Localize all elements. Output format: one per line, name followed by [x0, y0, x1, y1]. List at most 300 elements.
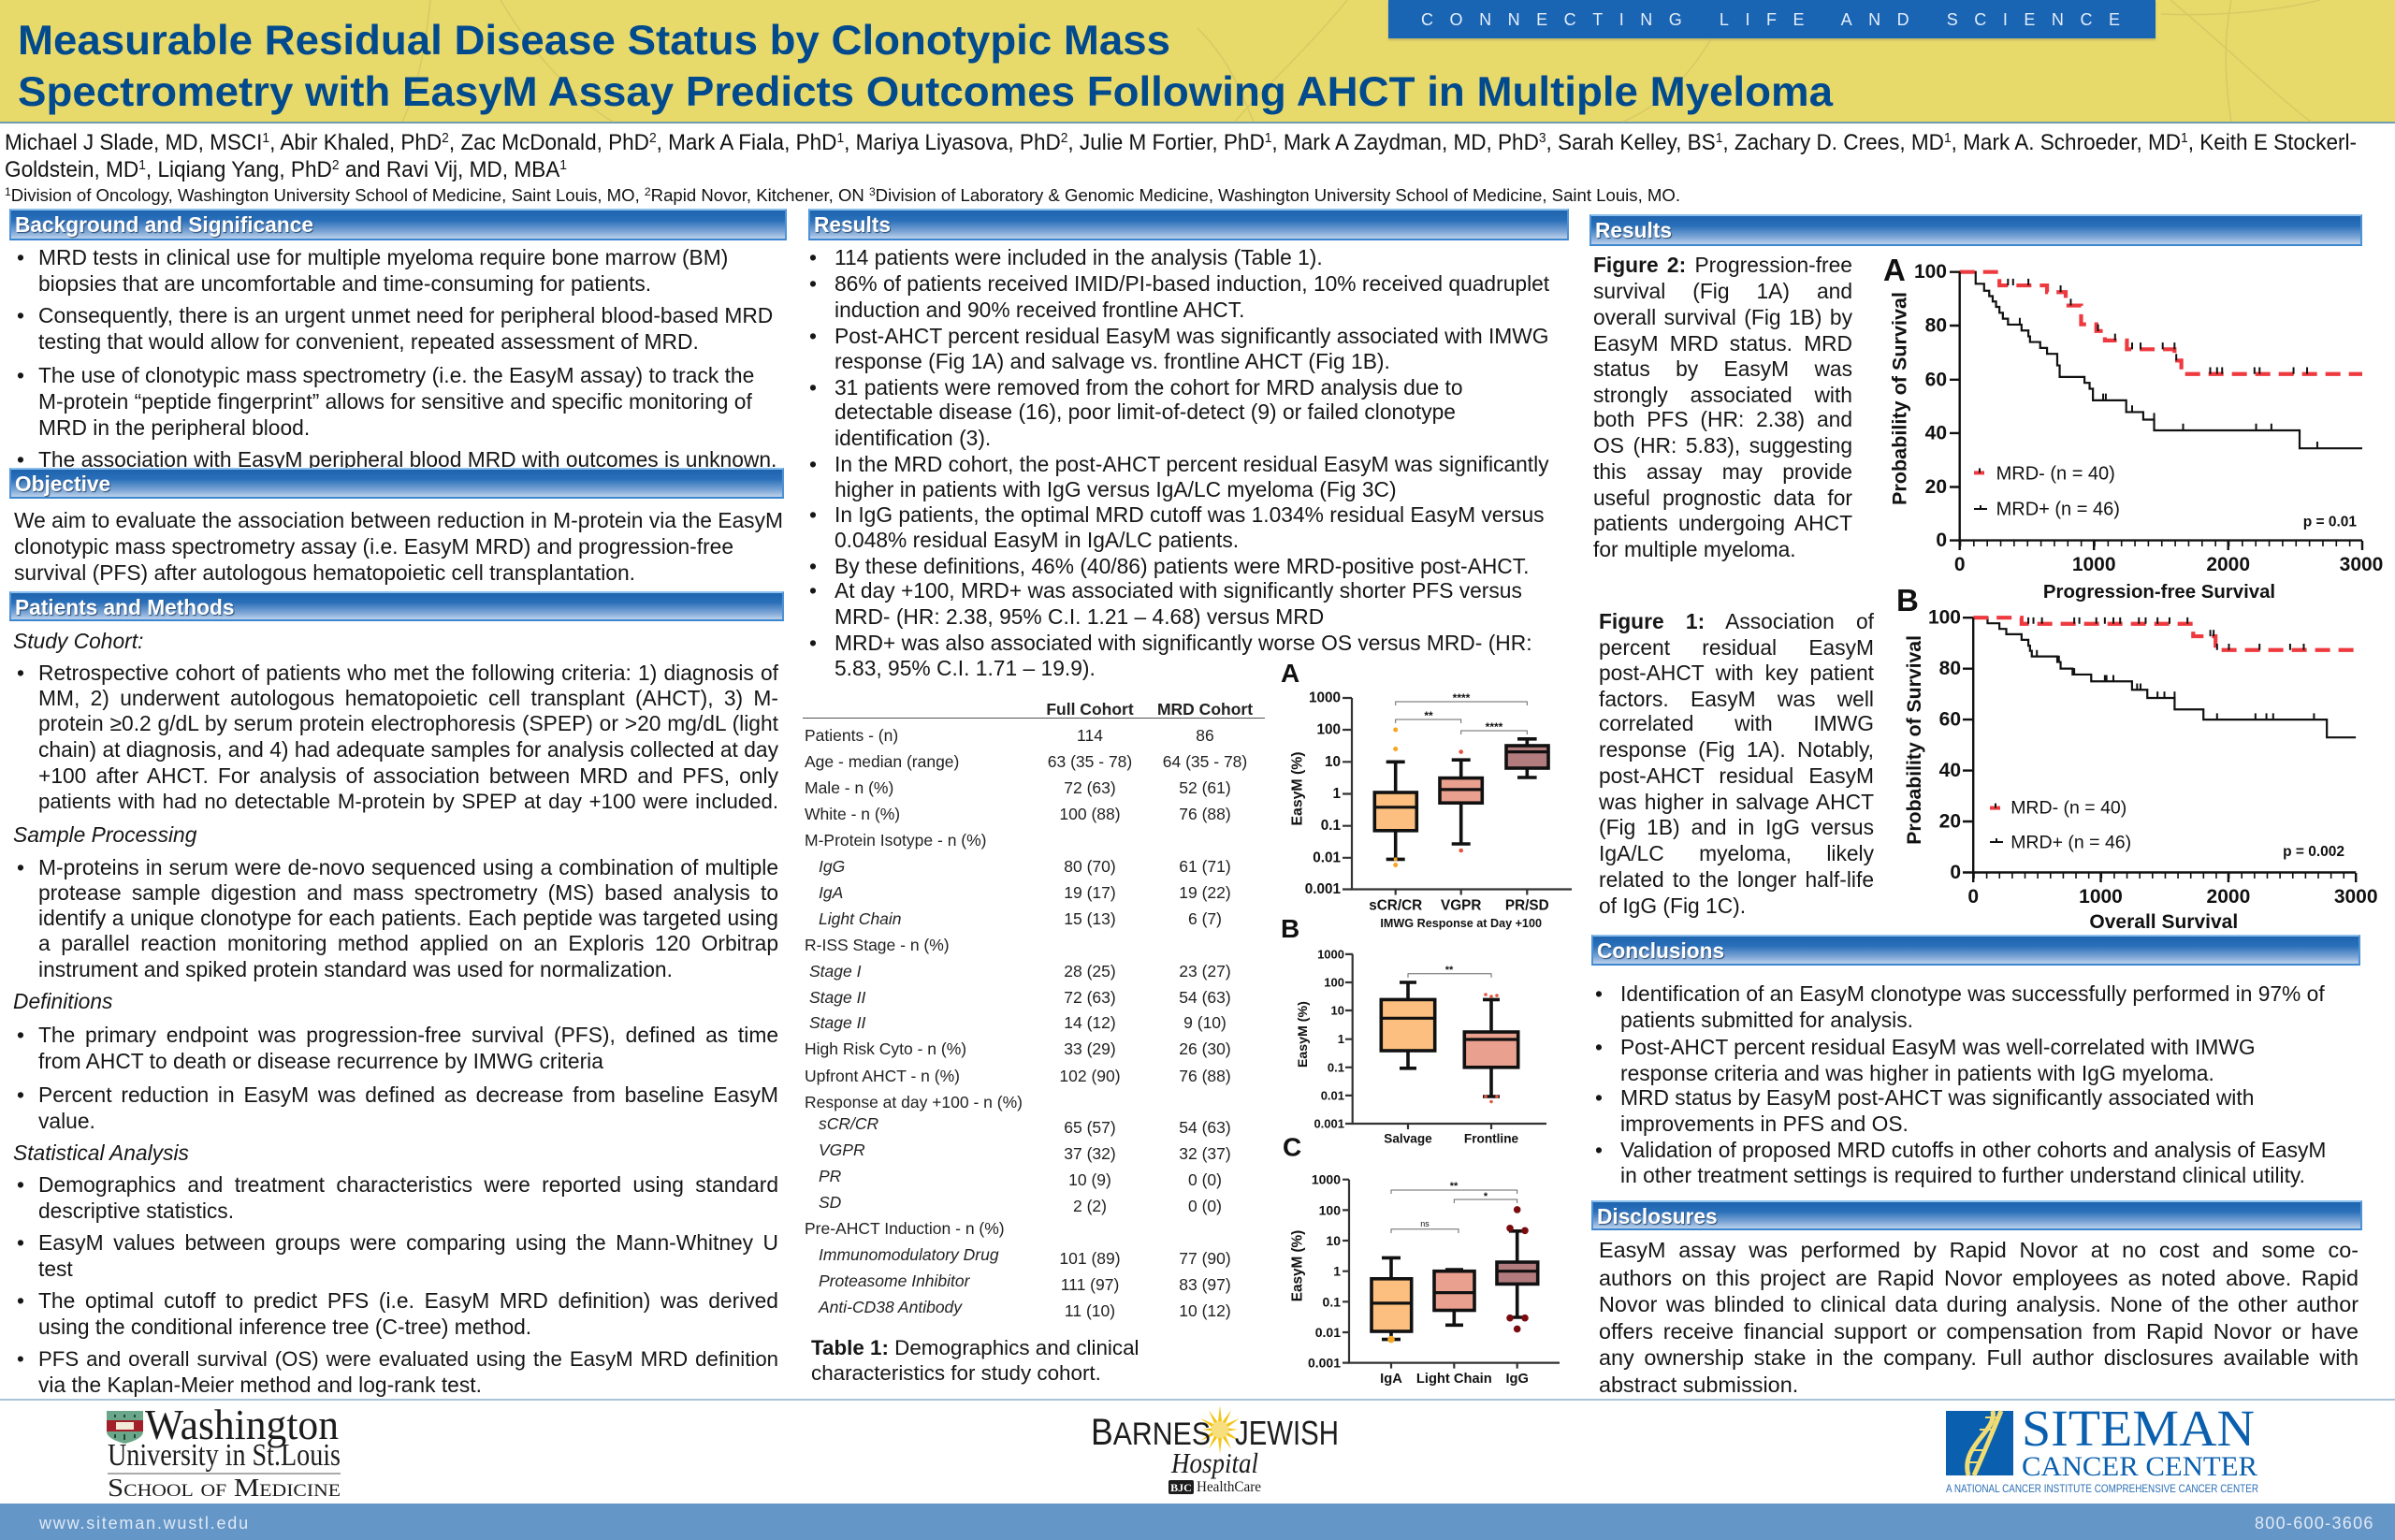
panel: disclosures: any ownership stake in the company. Full author disclosures available with — [1599, 1345, 2359, 1370]
authors and affiliations: Goldstein, MD — [5, 157, 150, 182]
panel: results (middle column): response (Fig 1A) and salvage vs. frontline AHCT (Fig 1B). — [835, 348, 1390, 372]
authors and affiliations: , Mark A. Schroeder, MD — [1952, 130, 2181, 155]
logo: Barnes-Jewish Hospital: HealthCare — [1197, 1479, 1261, 1495]
authors and affiliations: 1 — [836, 130, 844, 146]
panel: results (middle column): 0.048% residual EasyM in IgA/LC patients. — [835, 528, 1239, 552]
panel: patients and methods: patients with had no detectable M-protein by SPEP at day +100 were included. — [38, 790, 778, 812]
table 1: demographics: 54 (63) — [1179, 988, 1231, 1007]
panel: patients and methods: MM, 2) underwent autologous hematopoietic cell transplant (AHCT), 3) M- — [38, 685, 778, 709]
table 1: demographics: 10 (9) — [1068, 1170, 1111, 1189]
survival chart A: progression-free survival: Progression-free Survival — [2043, 582, 2275, 603]
panel: background and significance: MRD tests in clinical use for multiple myeloma require bone marrow (BM) — [38, 245, 728, 269]
panel: background and significance: The use of clonotypic mass spectrometry (i.e. the EasyM assay) to track the — [38, 363, 754, 387]
authors and affiliations: , Keith E Stockerl- — [2188, 130, 2357, 155]
authors and affiliations: 3 — [1539, 130, 1546, 146]
panel: patients and methods: EasyM values between groups were comparing using the Mann-Whitney U — [38, 1229, 778, 1254]
table 1: demographics: SD — [819, 1193, 841, 1212]
table 1: demographics: IgA — [819, 883, 843, 902]
panel: conclusions: in other treatment settings is required to further understand clinical utility. — [1620, 1162, 2305, 1186]
box plot A: IMWG response: PR/SD — [1505, 898, 1549, 913]
table caption: characteristics for study cohort. — [811, 1360, 1101, 1385]
survival chart A: progression-free survival: 80 — [1925, 314, 1947, 337]
survival chart A: progression-free survival: Probability of Survival — [1888, 292, 1910, 505]
text: figure 2 description: overall survival (Fig 1B) by — [1593, 305, 1852, 329]
table 1: demographics: Anti-CD38 Antibody — [819, 1298, 962, 1316]
authors and affiliations: 2 — [1061, 130, 1067, 146]
authors and affiliations: Division of Oncology, Washington University School of Medicine, Saint Louis, MO, — [11, 185, 645, 205]
survival chart B: overall survival: Probability of Survival — [1904, 635, 1925, 845]
panel: background and significance: The association with EasyM peripheral blood MRD with outcomes is unknown. — [38, 447, 777, 472]
table 1: demographics: 86 — [1196, 726, 1214, 745]
box plot A: IMWG response: 1 — [1332, 786, 1341, 802]
text: figure 1 description: factors. EasyM was well — [1599, 687, 1874, 711]
panel: patients and methods: descriptive statistics. — [38, 1198, 234, 1222]
panel: disclosures: EasyM assay was performed by Rapid Novor at no cost and some co- — [1599, 1237, 2359, 1261]
survival chart A: progression-free survival: 1000 — [2072, 554, 2116, 575]
authors and affiliations: , Abir Khaled, PhD — [269, 130, 442, 155]
box plot C: isotype: Light Chain — [1416, 1372, 1492, 1387]
table 1: demographics: Age - median (range) — [805, 752, 959, 771]
box plot A: IMWG response: **** — [1453, 691, 1471, 705]
table 1: demographics: 10 (12) — [1179, 1301, 1231, 1320]
table 1: demographics: 102 (90) — [1059, 1067, 1121, 1085]
survival chart A: progression-free survival: 3000 — [2340, 554, 2383, 575]
title: Spectrometry with EasyM Assay Predicts Outcomes Following AHCT in Multiple Myeloma — [18, 69, 1834, 115]
authors and affiliations: 1 — [262, 130, 269, 146]
box plot C: isotype: 0.01 — [1315, 1325, 1341, 1340]
table 1: demographics: 76 (88) — [1179, 805, 1231, 823]
panel: results (middle column): 5.83, 95% C.I. 1.71 – 19.9). — [835, 655, 1096, 679]
survival chart B: overall survival: MRD- (n = 40) — [2010, 798, 2126, 819]
survival chart B: overall survival: Overall Survival — [2089, 911, 2238, 933]
text: figure 1 description: of IgG (Fig 1C). — [1599, 893, 1746, 917]
box plot C: isotype: C — [1283, 1133, 1301, 1162]
panel: disclosures: offers receive financial support or compensation from Rapid Novor or have — [1599, 1319, 2359, 1344]
table 1: demographics: Full Cohort — [1046, 700, 1134, 719]
box plot B: salvage vs frontline — [1281, 914, 1546, 1145]
panel: patients and methods: Statistical Analysis — [13, 1140, 189, 1164]
panel: patients and methods: PFS and overall survival (OS) were evaluated using the EasyM MRD definition — [38, 1347, 778, 1370]
table 1: demographics: MRD Cohort — [1157, 700, 1253, 719]
table 1: demographics: 65 (57) — [1064, 1118, 1116, 1137]
panel: conclusions: Identification of an EasyM clonotype was successfully performed in 97% of — [1620, 981, 2325, 1005]
panel: objective: clonotypic mass spectrometry assay (i.e. EasyM MRD) and progression-free — [14, 533, 733, 558]
header band — [0, 0, 2395, 123]
box plot C: isotype: IgA — [1380, 1372, 1402, 1387]
table 1: demographics: R-ISS Stage - n (%) — [805, 936, 950, 954]
banner: connecting life and science: CONNECTING LIFE AND SCIENCE — [1421, 10, 2120, 29]
logo: Barnes-Jewish Hospital: BJC — [1170, 1481, 1192, 1494]
box plot C: isotype — [1283, 1133, 1560, 1387]
table 1: demographics: 11 (10) — [1065, 1301, 1115, 1320]
panel: patients and methods: Retrospective cohort of patients who met the following criteria: 1) diagnosis of — [38, 661, 778, 685]
panel: conclusions: patients submitted for analysis. — [1620, 1007, 1913, 1031]
text: figure 1 description: (Fig 1B) and in IgG versus — [1599, 814, 1874, 838]
panel: background and significance — [9, 209, 787, 472]
box plot C: isotype: ** — [1450, 1181, 1459, 1192]
table 1: demographics: 64 (35 - 78) — [1163, 752, 1247, 771]
authors and affiliations: 2 — [442, 130, 449, 146]
authors and affiliations: 2 — [645, 185, 651, 198]
box plot A: IMWG response: 1000 — [1309, 690, 1341, 705]
box plot A: IMWG response: 0.01 — [1313, 850, 1341, 865]
panel: results (right column heading): Results — [1595, 218, 1672, 242]
box plot A: IMWG response: 0.001 — [1305, 881, 1341, 897]
panel: background and significance: M-protein “peptide fingerprint” allows for sensitive and specific monitoring of — [38, 389, 752, 414]
survival chart A: progression-free survival: p = 0.01 — [2303, 515, 2357, 530]
panel: results (middle column): identification (3). — [835, 425, 991, 449]
banner: connecting life and science — [1388, 0, 2156, 38]
authors and affiliations: , Zac McDonald, PhD — [449, 130, 649, 155]
text: figure 1 description: response (Fig 1A). Notably, — [1599, 737, 1874, 762]
table 1: demographics: 111 (97) — [1061, 1275, 1119, 1294]
panel: patients and methods: from AHCT to death or disease recurrence by IMWG criteria — [38, 1048, 603, 1072]
box plot A: IMWG response: 10 — [1325, 754, 1341, 770]
panel: conclusions: improvements in PFS and OS. — [1620, 1111, 1909, 1136]
box plot B: salvage vs frontline: 1 — [1338, 1032, 1344, 1046]
table 1: demographics: M-Protein Isotype - n (%) — [805, 831, 986, 850]
table 1: demographics: 37 (32) — [1064, 1144, 1116, 1163]
panel: patients and methods: Percent reduction in EasyM was defined as decrease from baseline EasyM — [38, 1082, 778, 1106]
logo: Barnes-Jewish Hospital — [1091, 1405, 1339, 1495]
logo: Siteman Cancer Center: CANCER CENTER — [2022, 1451, 2257, 1482]
panel: background and significance: Consequently, there is an urgent unmet need for peripheral blood-based MRD — [38, 303, 773, 327]
authors and affiliations: 3 — [869, 185, 876, 198]
panel: patients and methods — [9, 591, 784, 1397]
panel: results (middle column): MRD- (HR: 2.38, 95% C.I. 1.21 – 4.68) versus MRD — [835, 604, 1324, 629]
authors and affiliations: 1 — [138, 157, 146, 173]
table 1: demographics: 80 (70) — [1064, 857, 1116, 876]
panel: patients and methods: The primary endpoint was progression-free survival (PFS), defined as time — [38, 1022, 778, 1046]
box plot B: salvage vs frontline: ** — [1445, 965, 1454, 976]
text: figure 1 description: IgA/LC myeloma, likely — [1599, 840, 1874, 864]
box plot A: IMWG response: ** — [1424, 709, 1433, 722]
table 1: demographics: Stage II — [809, 988, 865, 1007]
authors and affiliations: 1 — [1944, 130, 1952, 146]
title: Measurable Residual Disease Status by Clonotypic Mass — [18, 18, 1170, 64]
table 1: demographics: PR — [819, 1167, 841, 1185]
table 1: demographics: 15 (13) — [1064, 909, 1116, 928]
panel: patients and methods: Study Cohort: — [13, 629, 143, 653]
table 1: demographics: Light Chain — [819, 909, 902, 928]
panel: patients and methods: protease sample digestion and mass spectrometry (MS) based analysis to — [38, 879, 778, 904]
footer band — [0, 1504, 2395, 1540]
table 1: demographics: Male - n (%) — [805, 778, 893, 797]
logo: Washington University School of Medicine: University in St.Louis — [108, 1438, 341, 1473]
table 1: demographics: 52 (61) — [1179, 778, 1231, 797]
survival chart B: overall survival: 20 — [1939, 810, 1961, 833]
panel: disclosures: abstract submission. — [1599, 1372, 1798, 1396]
panel: background and significance: Background and Significance — [15, 212, 313, 237]
table 1: demographics: 72 (63) — [1064, 988, 1116, 1007]
panel: patients and methods: via the Kaplan-Meier method and log-rank test. — [38, 1372, 482, 1396]
survival chart A: progression-free survival: 20 — [1925, 476, 1947, 498]
survival chart B: overall survival: 3000 — [2334, 886, 2378, 908]
panel: objective: Objective — [15, 472, 110, 496]
table 1: demographics: 19 (17) — [1064, 883, 1116, 902]
authors and affiliations: 2 — [332, 157, 340, 173]
panel: conclusions: Validation of proposed MRD cutoffs in other cohorts and analysis of EasyM — [1620, 1138, 2326, 1162]
table 1: demographics: 14 (12) — [1064, 1013, 1116, 1032]
text: figure 1 description: Figure 1: Association of — [1599, 608, 1874, 632]
panel: results (middle column): 31 patients were removed from the cohort for MRD analysis due to — [835, 374, 1463, 399]
authors and affiliations: , Mark A Zaydman, MD, PhD — [1271, 130, 1539, 155]
survival chart B: overall survival: MRD+ (n = 46) — [2010, 832, 2131, 852]
panel: results (middle column) — [808, 209, 1569, 680]
table 1: demographics: White - n (%) — [805, 805, 900, 823]
table 1: demographics: Immunomodulatory Drug — [819, 1245, 999, 1264]
box plot C: isotype: ns — [1420, 1219, 1430, 1228]
panel: conclusions: Post-AHCT percent residual EasyM was well-correlated with IMWG — [1620, 1035, 2256, 1059]
panel: patients and methods: value. — [38, 1108, 95, 1132]
text: figure 2 description: both PFS (HR: 2.38) and — [1593, 406, 1852, 430]
authors and affiliations: 1 — [1265, 130, 1271, 146]
box plot C: isotype: 1 — [1333, 1264, 1341, 1279]
panel: patients and methods: using the conditional inference tree (C-tree) method. — [38, 1314, 531, 1338]
box plot C: isotype: * — [1484, 1191, 1488, 1202]
authors and affiliations: 1 — [5, 185, 11, 198]
panel: conclusions: Conclusions — [1597, 938, 1724, 963]
table 1: demographics: 100 (88) — [1059, 805, 1121, 823]
logo: Washington University School of Medicine: School of Medicine — [108, 1474, 341, 1502]
panel: background and significance: MRD in the peripheral blood. — [38, 415, 310, 440]
table 1: demographics: 23 (27) — [1179, 962, 1231, 981]
panel: patients and methods: Demographics and treatment characteristics were reported using standard — [38, 1171, 778, 1196]
panel: patients and methods: M-proteins in serum were de-novo sequenced using a combination of multiple — [38, 855, 778, 879]
panel: results (middle column): induction and 90% received frontline AHCT. — [835, 298, 1244, 322]
text: figure 2 description — [1593, 253, 1852, 561]
authors and affiliations: and Ravi Vij, MD, MBA — [340, 157, 560, 182]
authors and affiliations: Rapid Novor, Kitchener, ON — [651, 185, 869, 205]
text: figure 2 description: for multiple myeloma. — [1593, 537, 1796, 561]
box plot A: IMWG response: A — [1281, 659, 1299, 688]
panel: results (middle column): detectable disease (16), poor limit-of-detect (9) or failed clonotype — [835, 399, 1456, 423]
survival chart A: progression-free survival: 60 — [1925, 369, 1947, 390]
panel: patients and methods: Sample Processing — [13, 821, 196, 846]
text: figure 1 description — [1599, 608, 1874, 918]
panel: patients and methods: chain) at diagnosis, and 4) had adequate samples for analysis collected at day — [38, 737, 778, 762]
logo: Barnes-Jewish Hospital: Hospital — [1170, 1446, 1258, 1479]
box plot A: IMWG response: sCR/CR — [1369, 898, 1422, 913]
text: figure 2 description: OS (HR: 5.83), suggesting — [1593, 432, 1852, 457]
box plot A: IMWG response: 100 — [1316, 722, 1341, 737]
panel: disclosures: Disclosures — [1597, 1204, 1718, 1228]
box plot A: IMWG response — [1281, 659, 1572, 930]
panel: conclusions — [1591, 935, 2360, 1187]
text: figure 2 description: status by EasyM was — [1593, 356, 1852, 380]
table caption: Table 1: Demographics and clinical — [811, 1336, 1139, 1358]
survival chart B: overall survival: 100 — [1928, 607, 1961, 629]
text: figure 2 description: survival (Fig 1A) and — [1593, 279, 1852, 303]
figure 1 box plots — [1281, 659, 1572, 1387]
table 1: demographics: High Risk Cyto - n (%) — [805, 1039, 966, 1058]
table 1: demographics: IgG — [819, 857, 845, 876]
authors and affiliations: 2 — [649, 130, 657, 146]
panel: disclosures — [1591, 1200, 2362, 1396]
panel: patients and methods: identify a unique clonotype for each patients. Each peptide was targeted using — [38, 906, 778, 930]
survival chart B: overall survival: 0 — [1950, 862, 1961, 883]
table 1: demographics: Response at day +100 - n (%) — [805, 1093, 1023, 1111]
logo: Washington University School of Medicine: Washington — [145, 1401, 339, 1448]
panel: patients and methods: protein ≥0.2 g/dL by serum protein electrophoresis (SPEP) or >20 mg/dL (light — [38, 711, 778, 735]
box plot A: IMWG response: 0.1 — [1321, 818, 1341, 834]
survival chart B: overall survival: 60 — [1939, 709, 1961, 731]
logo: Barnes-Jewish Hospital: BARNES — [1091, 1412, 1211, 1453]
authors and affiliations: , Mark A Fiala, PhD — [657, 130, 836, 155]
authors and affiliations: , Liqiang Yang, PhD — [146, 157, 332, 182]
panel: results (middle column): In IgG patients, the optimal MRD cutoff was 1.034% residual EasyM versus — [835, 501, 1545, 526]
survival chart A: progression-free survival: 100 — [1914, 261, 1947, 283]
box plot C: isotype: 0.001 — [1308, 1356, 1341, 1371]
authors and affiliations — [5, 130, 2357, 205]
table 1: demographics: VGPR — [819, 1140, 865, 1159]
box plot B: salvage vs frontline: B — [1281, 914, 1299, 943]
table 1: demographics: 33 (29) — [1064, 1039, 1116, 1058]
survival chart A: progression-free survival: 0 — [1936, 530, 1947, 551]
panel: results (middle column): 86% of patients received IMID/PI-based induction, 10% received quadruplet — [835, 271, 1549, 296]
panel: objective: survival (PFS) after autologous hematopoietic cell transplantation. — [14, 559, 635, 584]
title — [18, 18, 1834, 115]
panel: disclosures: Novor was blinded to clinical data during analysis. None of the other author — [1599, 1291, 2359, 1315]
text: figure 2 description: EasyM MRD status. MRD — [1593, 331, 1852, 356]
logo: Barnes-Jewish Hospital: JEWISH — [1235, 1414, 1339, 1452]
table 1: demographics: 61 (71) — [1179, 857, 1231, 876]
authors and affiliations: 1 — [559, 157, 567, 173]
footer rule — [0, 1399, 2395, 1401]
survival chart A: progression-free survival: MRD- (n = 40) — [1996, 463, 2115, 484]
logo: Siteman Cancer Center: A NATIONAL CANCER INSTITUTE COMPREHENSIVE CANCER CENTER — [1946, 1482, 2258, 1495]
panel: background and significance: biopsies that are uncomfortable and time-consuming for patients. — [38, 271, 651, 296]
table 1: demographics: 77 (90) — [1179, 1249, 1231, 1268]
box plot C: isotype: 10 — [1326, 1233, 1341, 1248]
panel: results (middle column): By these definitions, 46% (40/86) patients were MRD-positive post-AHCT. — [835, 554, 1529, 578]
table 1: demographics: 28 (25) — [1064, 962, 1116, 981]
panel: patients and methods: a parallel reaction monitoring method applied on an Exploris 120 Orbitrap — [38, 930, 778, 954]
text: figure 1 description: related to the longer half-life — [1599, 866, 1874, 891]
survival chart A: progression-free survival: MRD+ (n = 46) — [1996, 500, 2120, 520]
panel: objective: We aim to evaluate the association between reduction in M-protein via the EasyM — [14, 507, 783, 531]
survival chart B: overall survival: 0 — [1967, 886, 1979, 908]
figure 2 Kaplan-Meier charts — [1883, 253, 2383, 933]
panel: patients and methods: The optimal cutoff to predict PFS (i.e. EasyM MRD definition) was derived — [38, 1287, 778, 1312]
box plot B: salvage vs frontline: 0.001 — [1314, 1117, 1344, 1130]
table 1: demographics: 19 (22) — [1179, 883, 1231, 902]
table 1: demographics: Upfront AHCT - n (%) — [805, 1067, 960, 1085]
authors and affiliations: Division of Laboratory & Genomic Medicine, Washington University School of Medicine, Saint Louis, MO. — [876, 185, 1680, 205]
logo: Siteman Cancer Center — [1946, 1400, 2258, 1495]
footer band: www.siteman.wustl.edu — [39, 1514, 250, 1533]
authors and affiliations: , Sarah Kelley, BS — [1546, 130, 1716, 155]
box plot A: IMWG response: VGPR — [1441, 898, 1481, 913]
survival chart B: overall survival: p = 0.002 — [2283, 844, 2344, 860]
box plot C: isotype: 100 — [1319, 1202, 1341, 1217]
panel: patients and methods: Definitions — [13, 988, 112, 1012]
panel: conclusions: response criteria and was higher in patients with IgG myeloma. — [1620, 1061, 2214, 1085]
text: figure 2 description: useful prognostic data for — [1593, 485, 1852, 509]
box plot A: IMWG response: IMWG Response at Day +100 — [1380, 917, 1542, 930]
table 1: demographics: 32 (37) — [1179, 1144, 1231, 1163]
table 1: demographics: Patients - (n) — [805, 726, 898, 745]
text: figure 2 description: this assay may provide — [1593, 458, 1852, 483]
box plot C: isotype: 1000 — [1312, 1172, 1341, 1187]
authors and affiliations: , Zachary D. Crees, MD — [1722, 130, 1944, 155]
survival chart B: overall survival: B — [1896, 583, 1919, 617]
panel: results (middle column): Post-AHCT percent residual EasyM was significantly associated with IMWG — [835, 324, 1549, 348]
box plot A: IMWG response: EasyM (%) — [1289, 751, 1306, 826]
table 1: demographics: sCR/CR — [819, 1114, 878, 1133]
panel: results (middle column): MRD+ was also associated with significantly worse OS versus MRD- (HR: — [835, 631, 1532, 655]
survival chart A: progression-free survival: 0 — [1954, 554, 1966, 575]
authors and affiliations: Michael J Slade, MD, MSCI — [5, 130, 285, 155]
panel: patients and methods: instrument and spiked protein standard was used for normalization. — [38, 956, 673, 981]
survival chart B: overall survival: 2000 — [2207, 886, 2250, 908]
panel: results (middle column): Results — [814, 212, 891, 237]
survival chart A: progression-free survival: 2000 — [2206, 554, 2250, 575]
panel: background and significance: testing that would allow for convenient, repeated assessment of MRD. — [38, 329, 699, 354]
survival chart B: overall survival — [1896, 583, 2378, 933]
table 1: demographics: 76 (88) — [1179, 1067, 1231, 1085]
table caption — [811, 1336, 1139, 1385]
footer band: 800-600-3606 — [2255, 1514, 2374, 1533]
table 1: demographics: 63 (35 - 78) — [1048, 752, 1132, 771]
panel: objective — [9, 468, 784, 585]
survival chart A: progression-free survival — [1883, 253, 2383, 603]
panel: results (middle column): At day +100, MRD+ was associated with significantly shorter PFS versus — [835, 578, 1522, 603]
table 1: demographics: Pre-AHCT Induction - n (%) — [805, 1219, 1005, 1238]
survival chart B: overall survival: 1000 — [2079, 886, 2123, 908]
table 1: demographics: Proteasome Inhibitor — [819, 1271, 969, 1290]
text: figure 1 description: post-AHCT residual EasyM — [1599, 763, 1874, 788]
panel: results (middle column): In the MRD cohort, the post-AHCT percent residual EasyM was significantly — [835, 451, 1549, 475]
panel: results (middle column): 114 patients were included in the analysis (Table 1). — [835, 245, 1323, 269]
table 1: demographics: 72 (63) — [1064, 778, 1116, 797]
authors and affiliations: , Mariya Liyasova, PhD — [844, 130, 1061, 155]
panel: conclusions: MRD status by EasyM post-AHCT was significantly associated with — [1620, 1085, 2254, 1110]
panel: disclosures: authors on this project are Rapid Novor employees as noted above. Rapid — [1599, 1265, 2359, 1289]
box plot B: salvage vs frontline: 100 — [1324, 975, 1344, 990]
text: figure 1 description: percent residual EasyM — [1599, 634, 1874, 659]
box plot B: salvage vs frontline: 0.1 — [1328, 1060, 1344, 1074]
survival chart A: progression-free survival: A — [1883, 253, 1906, 287]
table 1: demographics: Stage II — [809, 1013, 865, 1032]
box plot A: IMWG response: **** — [1486, 720, 1503, 734]
box plot C: isotype: EasyM (%) — [1289, 1230, 1306, 1301]
box plot B: salvage vs frontline: 0.01 — [1321, 1088, 1344, 1102]
panel: results (middle column): higher in patients with IgG versus IgA/LC myeloma (Fig 3C) — [835, 477, 1397, 501]
box plot B: salvage vs frontline: EasyM (%) — [1296, 1001, 1311, 1068]
table 1: demographics: 0 (0) — [1188, 1197, 1222, 1215]
table 1: demographics: 101 (89) — [1059, 1249, 1121, 1268]
table 1: demographics: 54 (63) — [1179, 1118, 1231, 1137]
box plot B: salvage vs frontline: 1000 — [1317, 947, 1344, 961]
text: figure 2 description: Figure 2: Progression-free — [1593, 253, 1852, 277]
survival chart B: overall survival: 40 — [1939, 760, 1961, 781]
box plot B: salvage vs frontline: 10 — [1331, 1003, 1344, 1018]
text: figure 1 description: was higher in salvage AHCT — [1599, 790, 1874, 814]
table 1: demographics: 114 — [1077, 726, 1103, 745]
text: figure 1 description: correlated with IMWG — [1599, 711, 1874, 735]
table 1: demographics: 6 (7) — [1188, 909, 1222, 928]
box plot B: salvage vs frontline: Salvage — [1384, 1131, 1432, 1145]
panel: patients and methods: +100 after AHCT. For analysis of association between MRD and PFS, only — [38, 763, 778, 788]
box plot C: isotype: IgG — [1505, 1372, 1529, 1387]
table 1: demographics: 83 (97) — [1179, 1275, 1231, 1294]
table 1: demographics: 2 (2) — [1073, 1197, 1107, 1215]
authors and affiliations: 1 — [1716, 130, 1722, 146]
table 1: demographics: 9 (10) — [1183, 1013, 1227, 1032]
text: figure 1 description: post-AHCT with key patient — [1599, 661, 1874, 685]
box plot C: isotype: 0.1 — [1323, 1294, 1341, 1309]
